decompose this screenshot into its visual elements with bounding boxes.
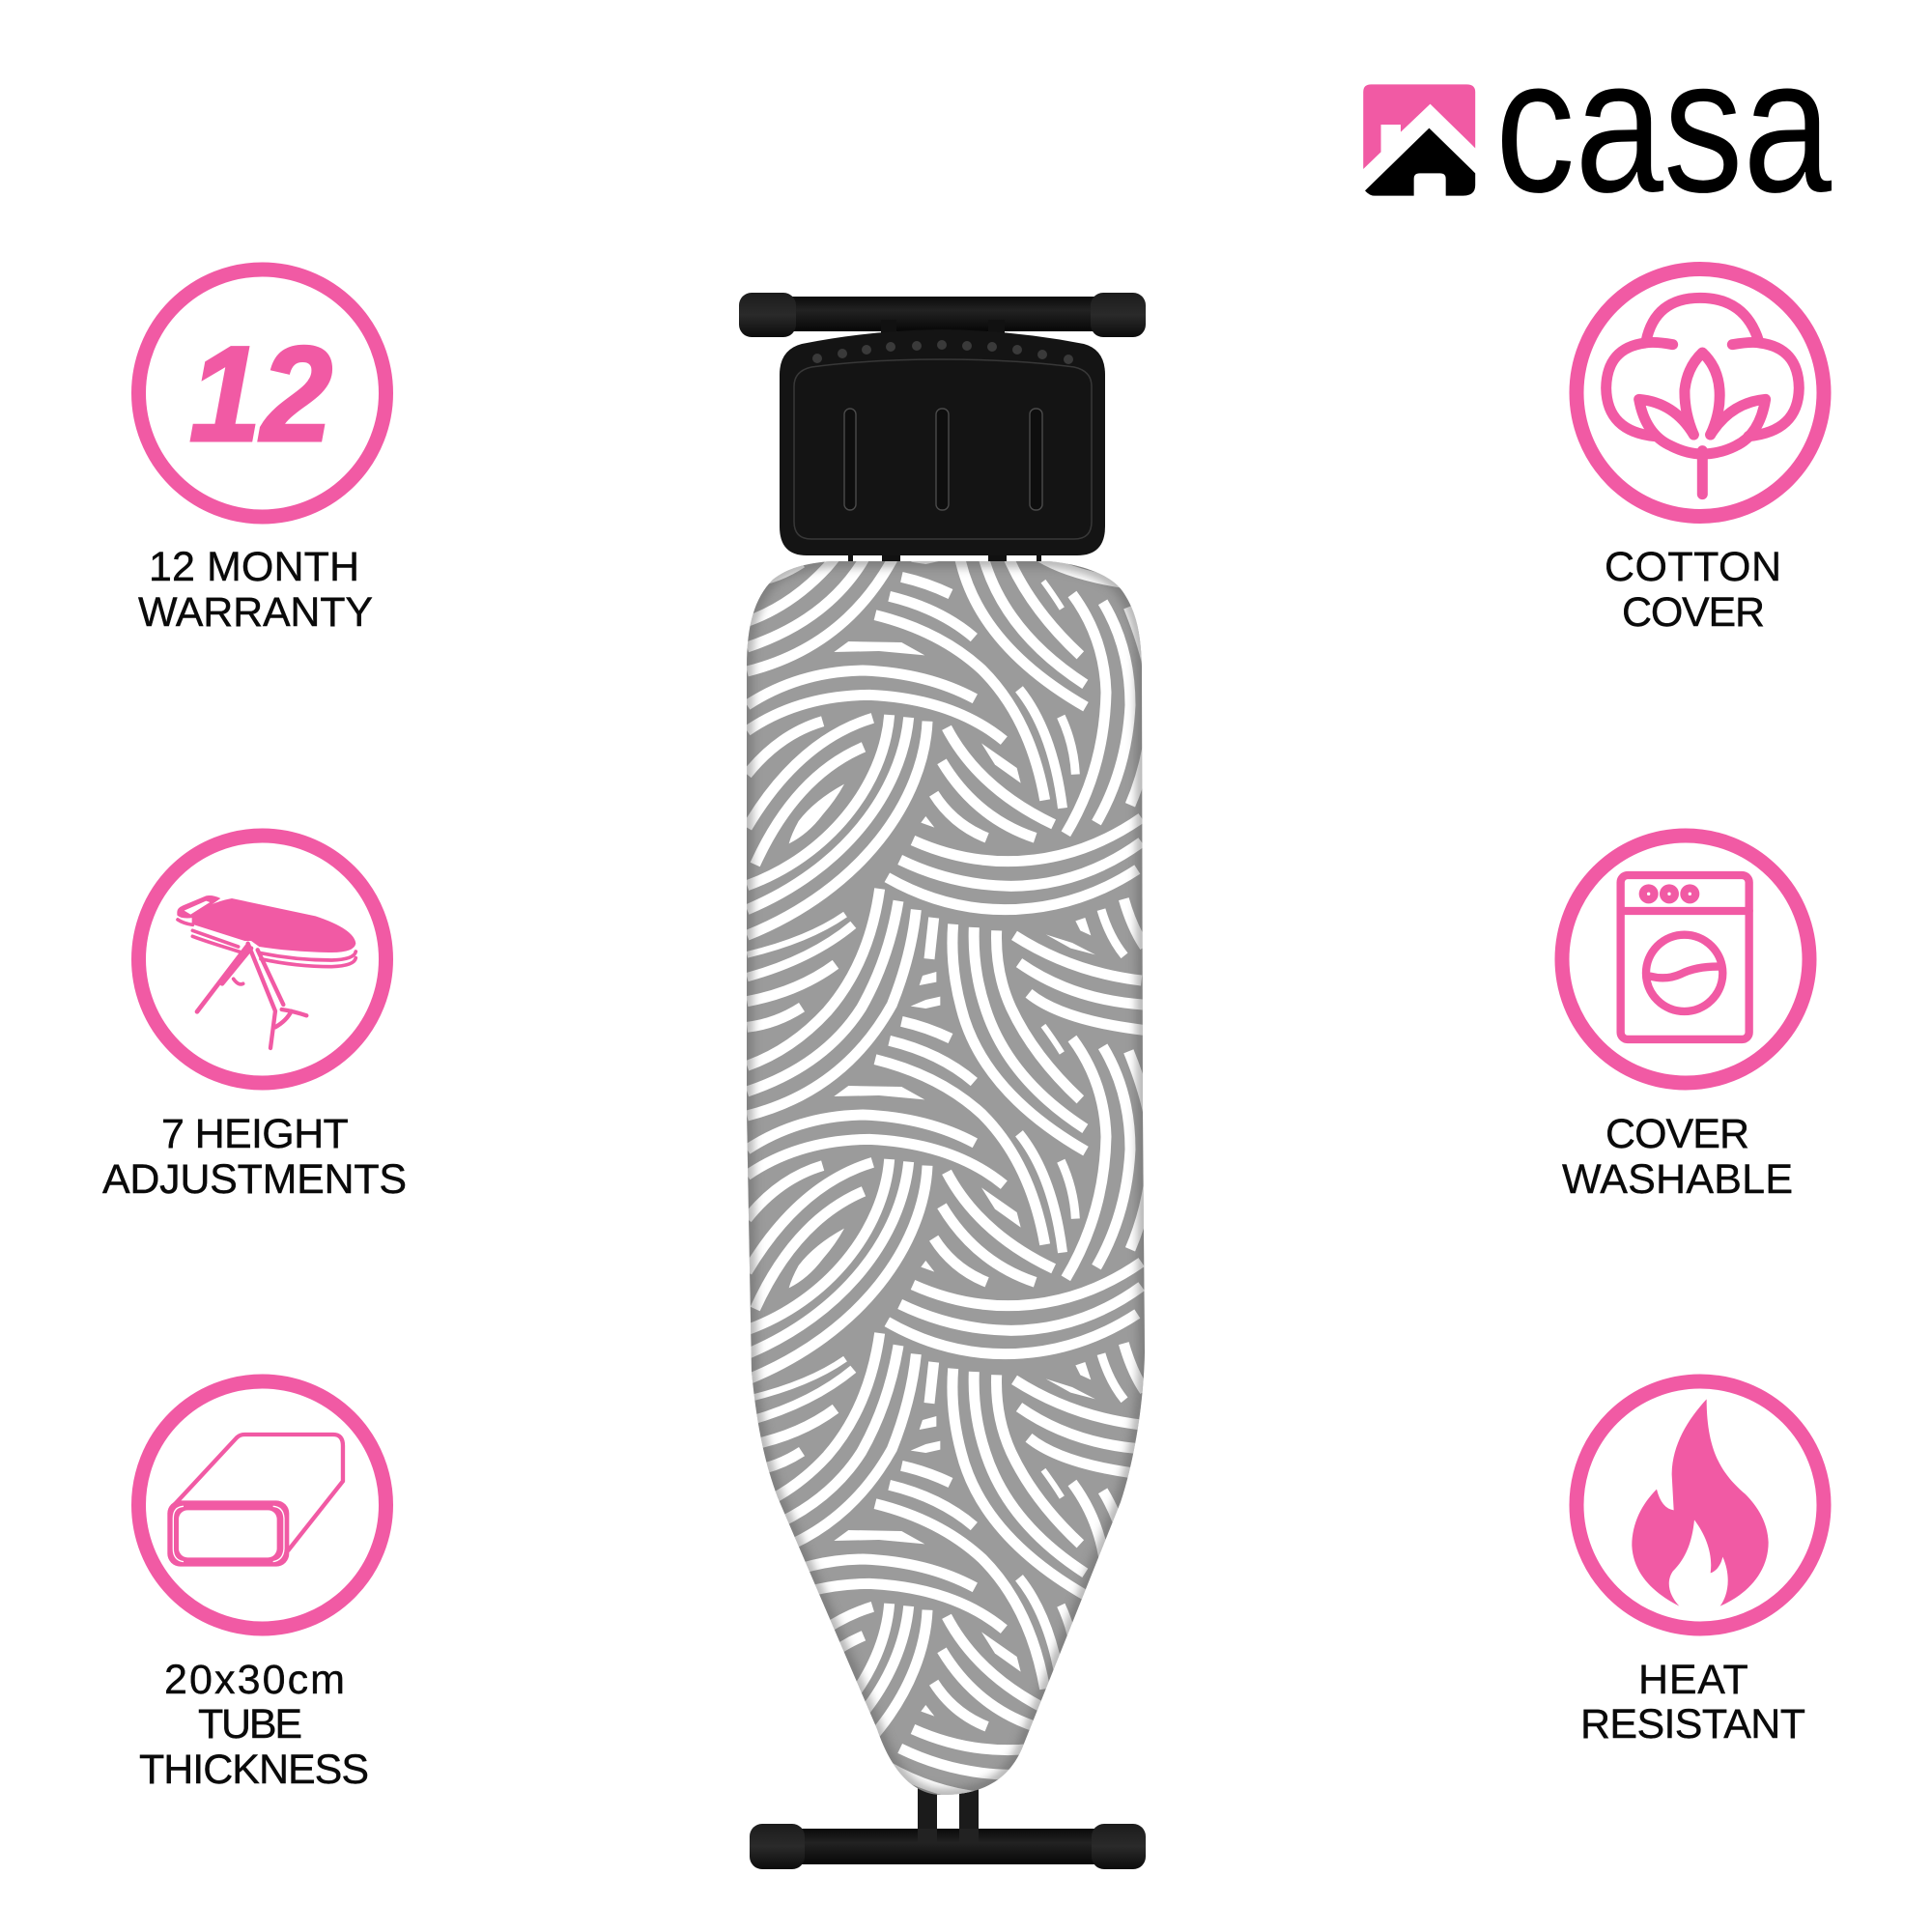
icon: ironing board (139, 836, 386, 1083)
label: RESISTANT (1580, 1701, 1805, 1747)
icon: flame (1577, 1381, 1824, 1629)
label: COVER (1605, 1111, 1749, 1157)
label: ADJUSTMENTS (102, 1156, 407, 1203)
ironing board product (734, 293, 1159, 1869)
feature: 7 height adjustments (102, 836, 407, 1203)
label: 20x30cm (164, 1657, 345, 1703)
icon: rectangular tube (139, 1381, 386, 1629)
icon: washing machine (1562, 836, 1809, 1083)
label: HEAT (1638, 1657, 1748, 1703)
icon: cotton flower (1577, 269, 1824, 516)
board cover with swirl pattern (747, 561, 1145, 1795)
icon: 12 badge (139, 270, 386, 517)
label: 7 HEIGHT (161, 1111, 348, 1157)
label: WARRANTY (138, 589, 373, 636)
label: THICKNESS (139, 1747, 369, 1793)
label: TUBE (198, 1701, 302, 1747)
icon: 12 badge: 12 (189, 318, 332, 469)
logo house icon (1363, 84, 1475, 196)
feature: heat resistant (1577, 1381, 1824, 1747)
iron rest connectors (848, 554, 1041, 566)
bottom rest bar (750, 1824, 1146, 1869)
feature: tube thickness (139, 1381, 386, 1793)
lower leg tubes (918, 1785, 979, 1843)
iron rest plate (780, 329, 1105, 555)
label: COVER (1622, 589, 1765, 636)
top rest bar (739, 293, 1146, 337)
feature: cover washable (1562, 836, 1809, 1203)
feature: cotton cover (1577, 269, 1824, 636)
label: 12 MONTH (149, 544, 359, 590)
feature: 12 month warranty (138, 270, 386, 636)
label: COTTON (1605, 544, 1781, 590)
logo wordmark: casa (1495, 18, 1833, 232)
label: WASHABLE (1562, 1156, 1793, 1203)
logo: casa (1363, 18, 1833, 232)
